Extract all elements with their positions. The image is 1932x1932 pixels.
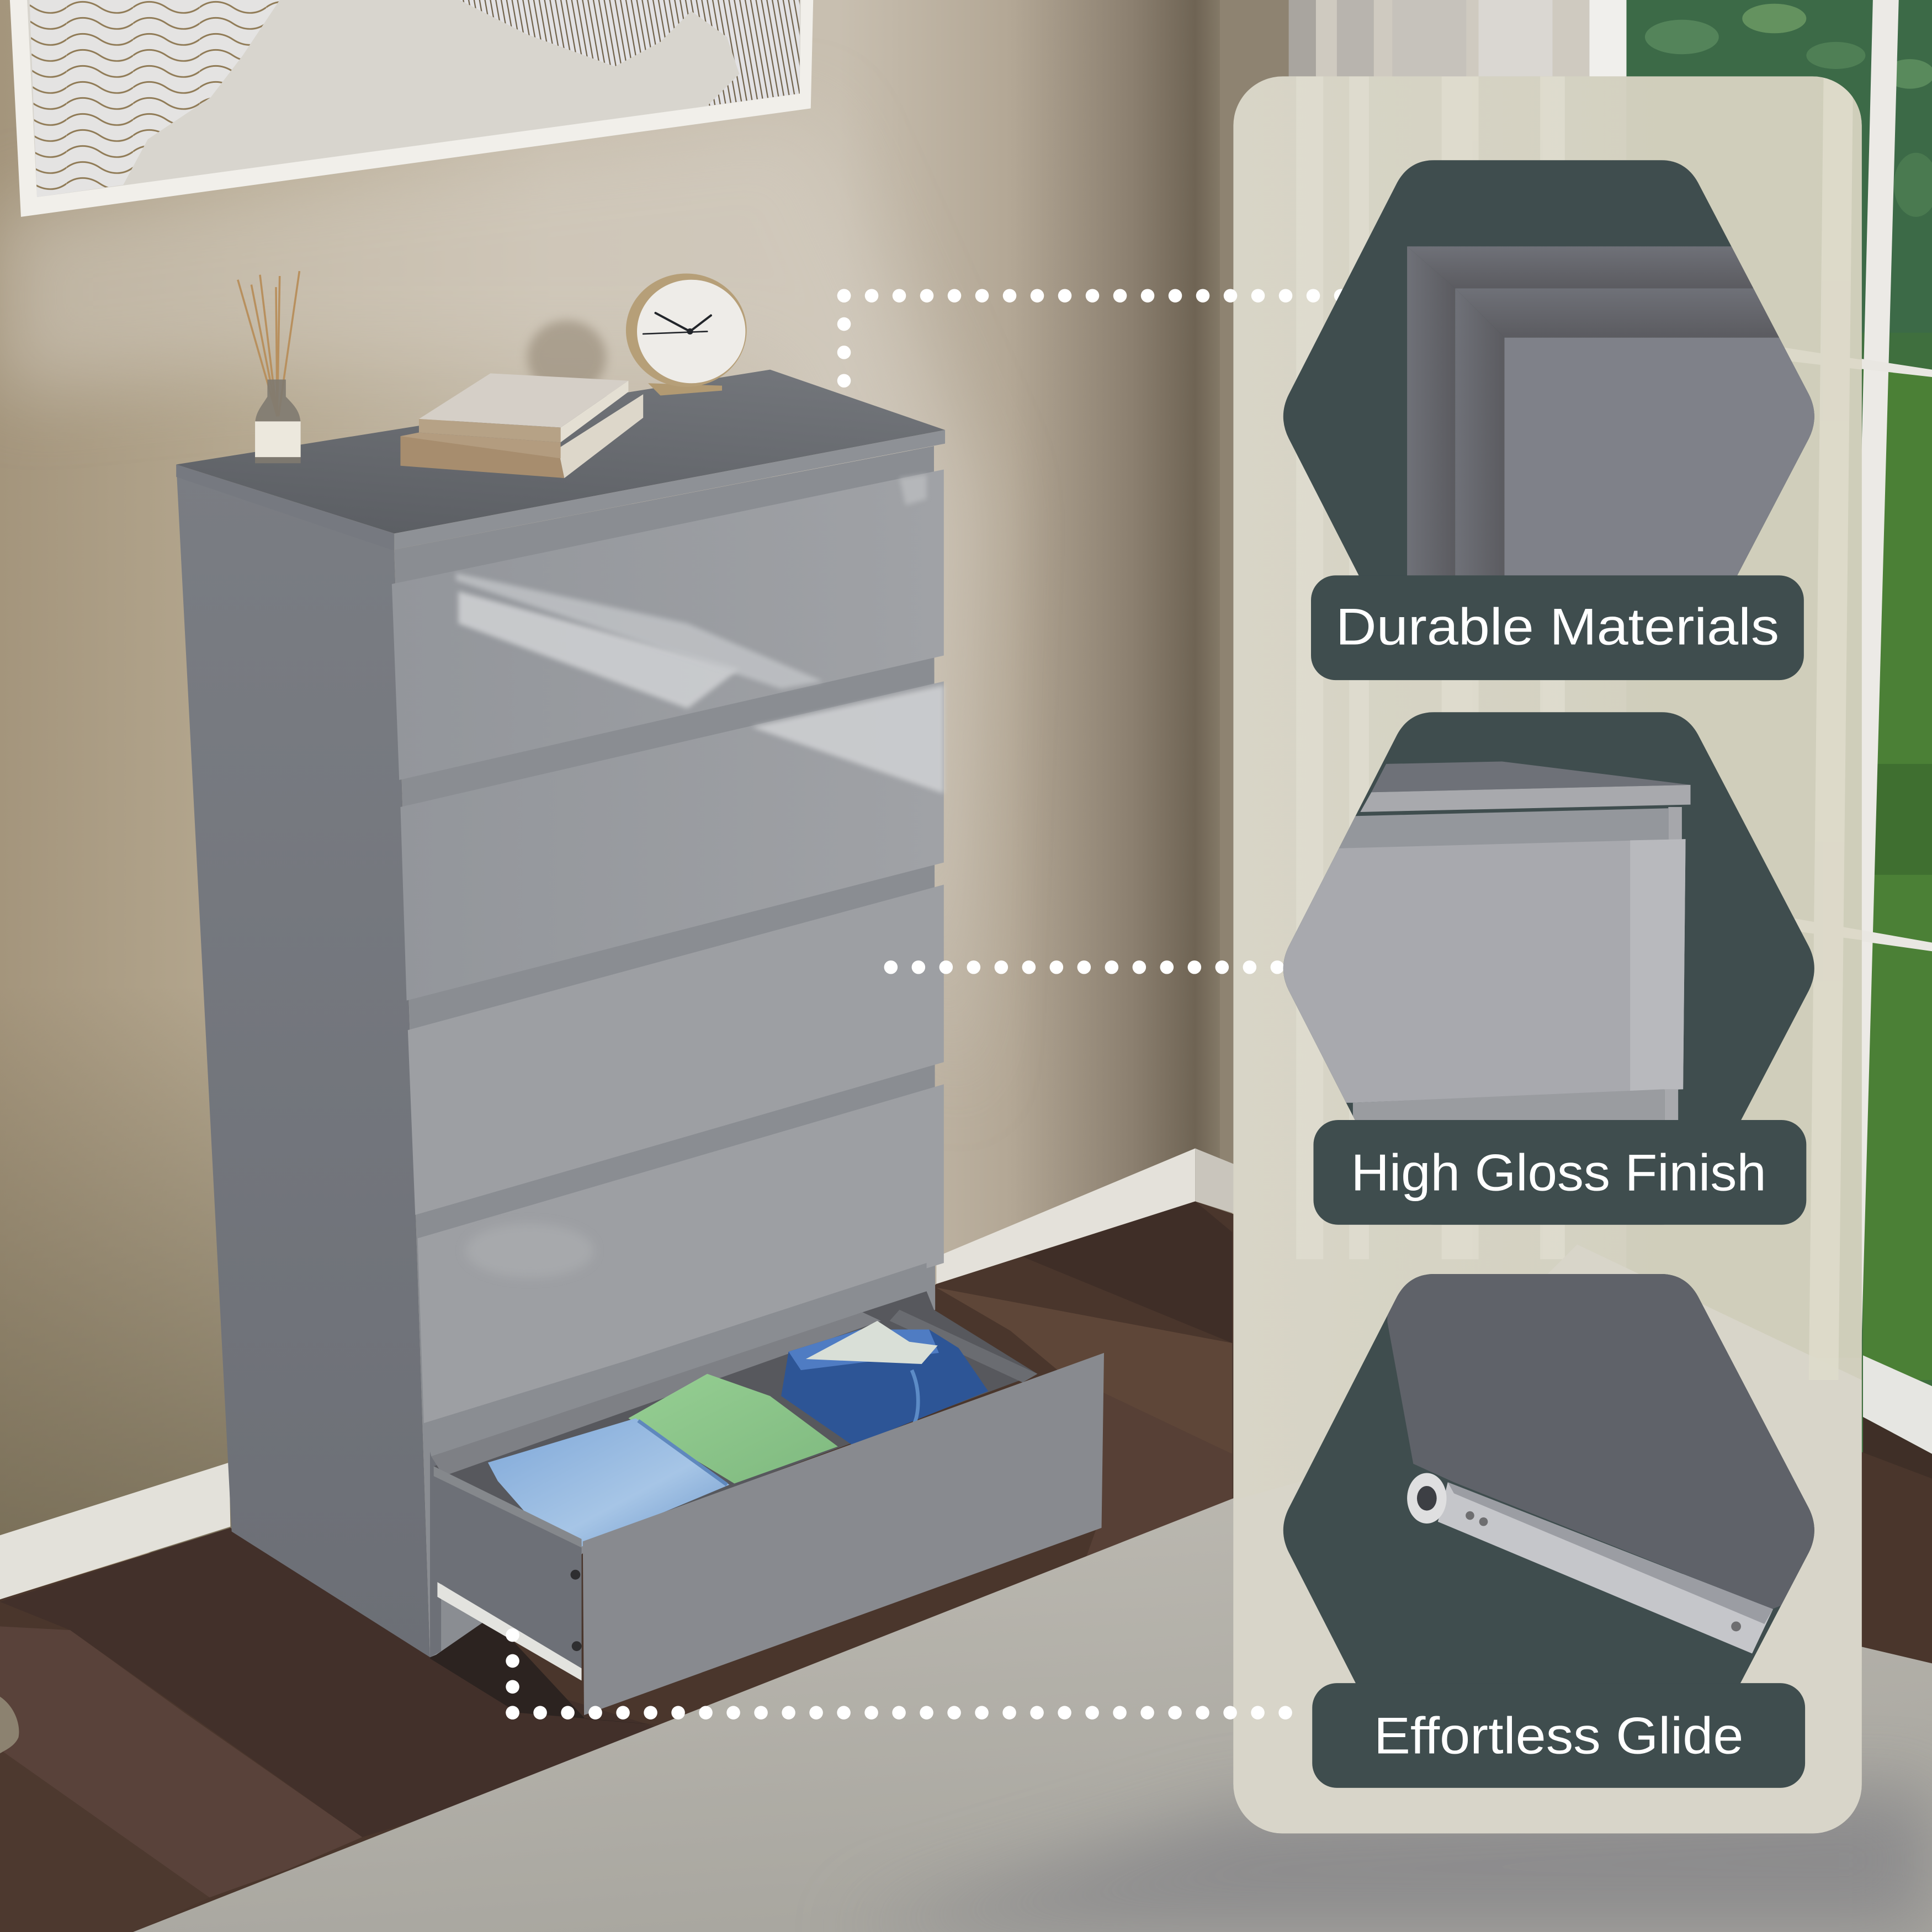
clothes: jeans	[488, 1418, 729, 1548]
drawer 4	[418, 1084, 944, 1423]
floor	[0, 1201, 1932, 1932]
chest front frame	[394, 446, 935, 1657]
rug	[133, 1498, 1932, 1932]
clothes: navy hoodie	[781, 1321, 988, 1445]
herringbone planks	[0, 1201, 1232, 1932]
curtain	[1289, 0, 1626, 1281]
wall art	[10, 0, 813, 217]
chest of drawers	[176, 76, 1873, 1833]
side table edge	[0, 1697, 19, 1753]
drawer side panel	[434, 1474, 582, 1678]
bottom rail	[424, 1263, 927, 1456]
heading: durable materials: Durable Materials	[1336, 597, 1779, 655]
drawer front	[583, 1353, 1104, 1715]
window and garden	[1626, 0, 1932, 1651]
books	[400, 320, 643, 478]
chest top	[176, 370, 945, 534]
hexagon: layered panels	[1283, 160, 1814, 575]
dotted connector: high gloss finish	[891, 964, 1281, 970]
drawer 3	[408, 885, 944, 1215]
panel: features	[1233, 76, 1862, 1833]
heading: effortless glide: Effortless Glide	[1374, 1706, 1743, 1764]
open drawer	[431, 1291, 1104, 1715]
slide rail	[437, 1582, 582, 1681]
heading: high gloss finish: High Gloss Finish	[1351, 1143, 1766, 1201]
diffuser	[238, 271, 301, 463]
dotted connector: effortless glide	[513, 1633, 1311, 1713]
see-through panel shading	[1232, 76, 1873, 1833]
label: high gloss finish	[1313, 1120, 1806, 1225]
drawer 2	[400, 681, 944, 1000]
feature 2: high gloss finish	[1269, 702, 1824, 1232]
clothes: green shirt	[628, 1374, 838, 1484]
label: durable materials	[1311, 575, 1804, 680]
hexagon: slide rail closeup	[1269, 1269, 1824, 1799]
chest side	[176, 465, 430, 1657]
dotted connector: durable materials	[844, 296, 1343, 409]
feature 3: effortless glide	[1269, 1269, 1824, 1799]
drawer 1	[392, 469, 944, 780]
feature 1: durable materials	[1269, 154, 1825, 680]
clock	[626, 274, 747, 396]
label: effortless glide	[1312, 1683, 1805, 1788]
hexagon: gloss drawer closeup	[1269, 702, 1824, 1232]
baseboards	[0, 1148, 1235, 1599]
